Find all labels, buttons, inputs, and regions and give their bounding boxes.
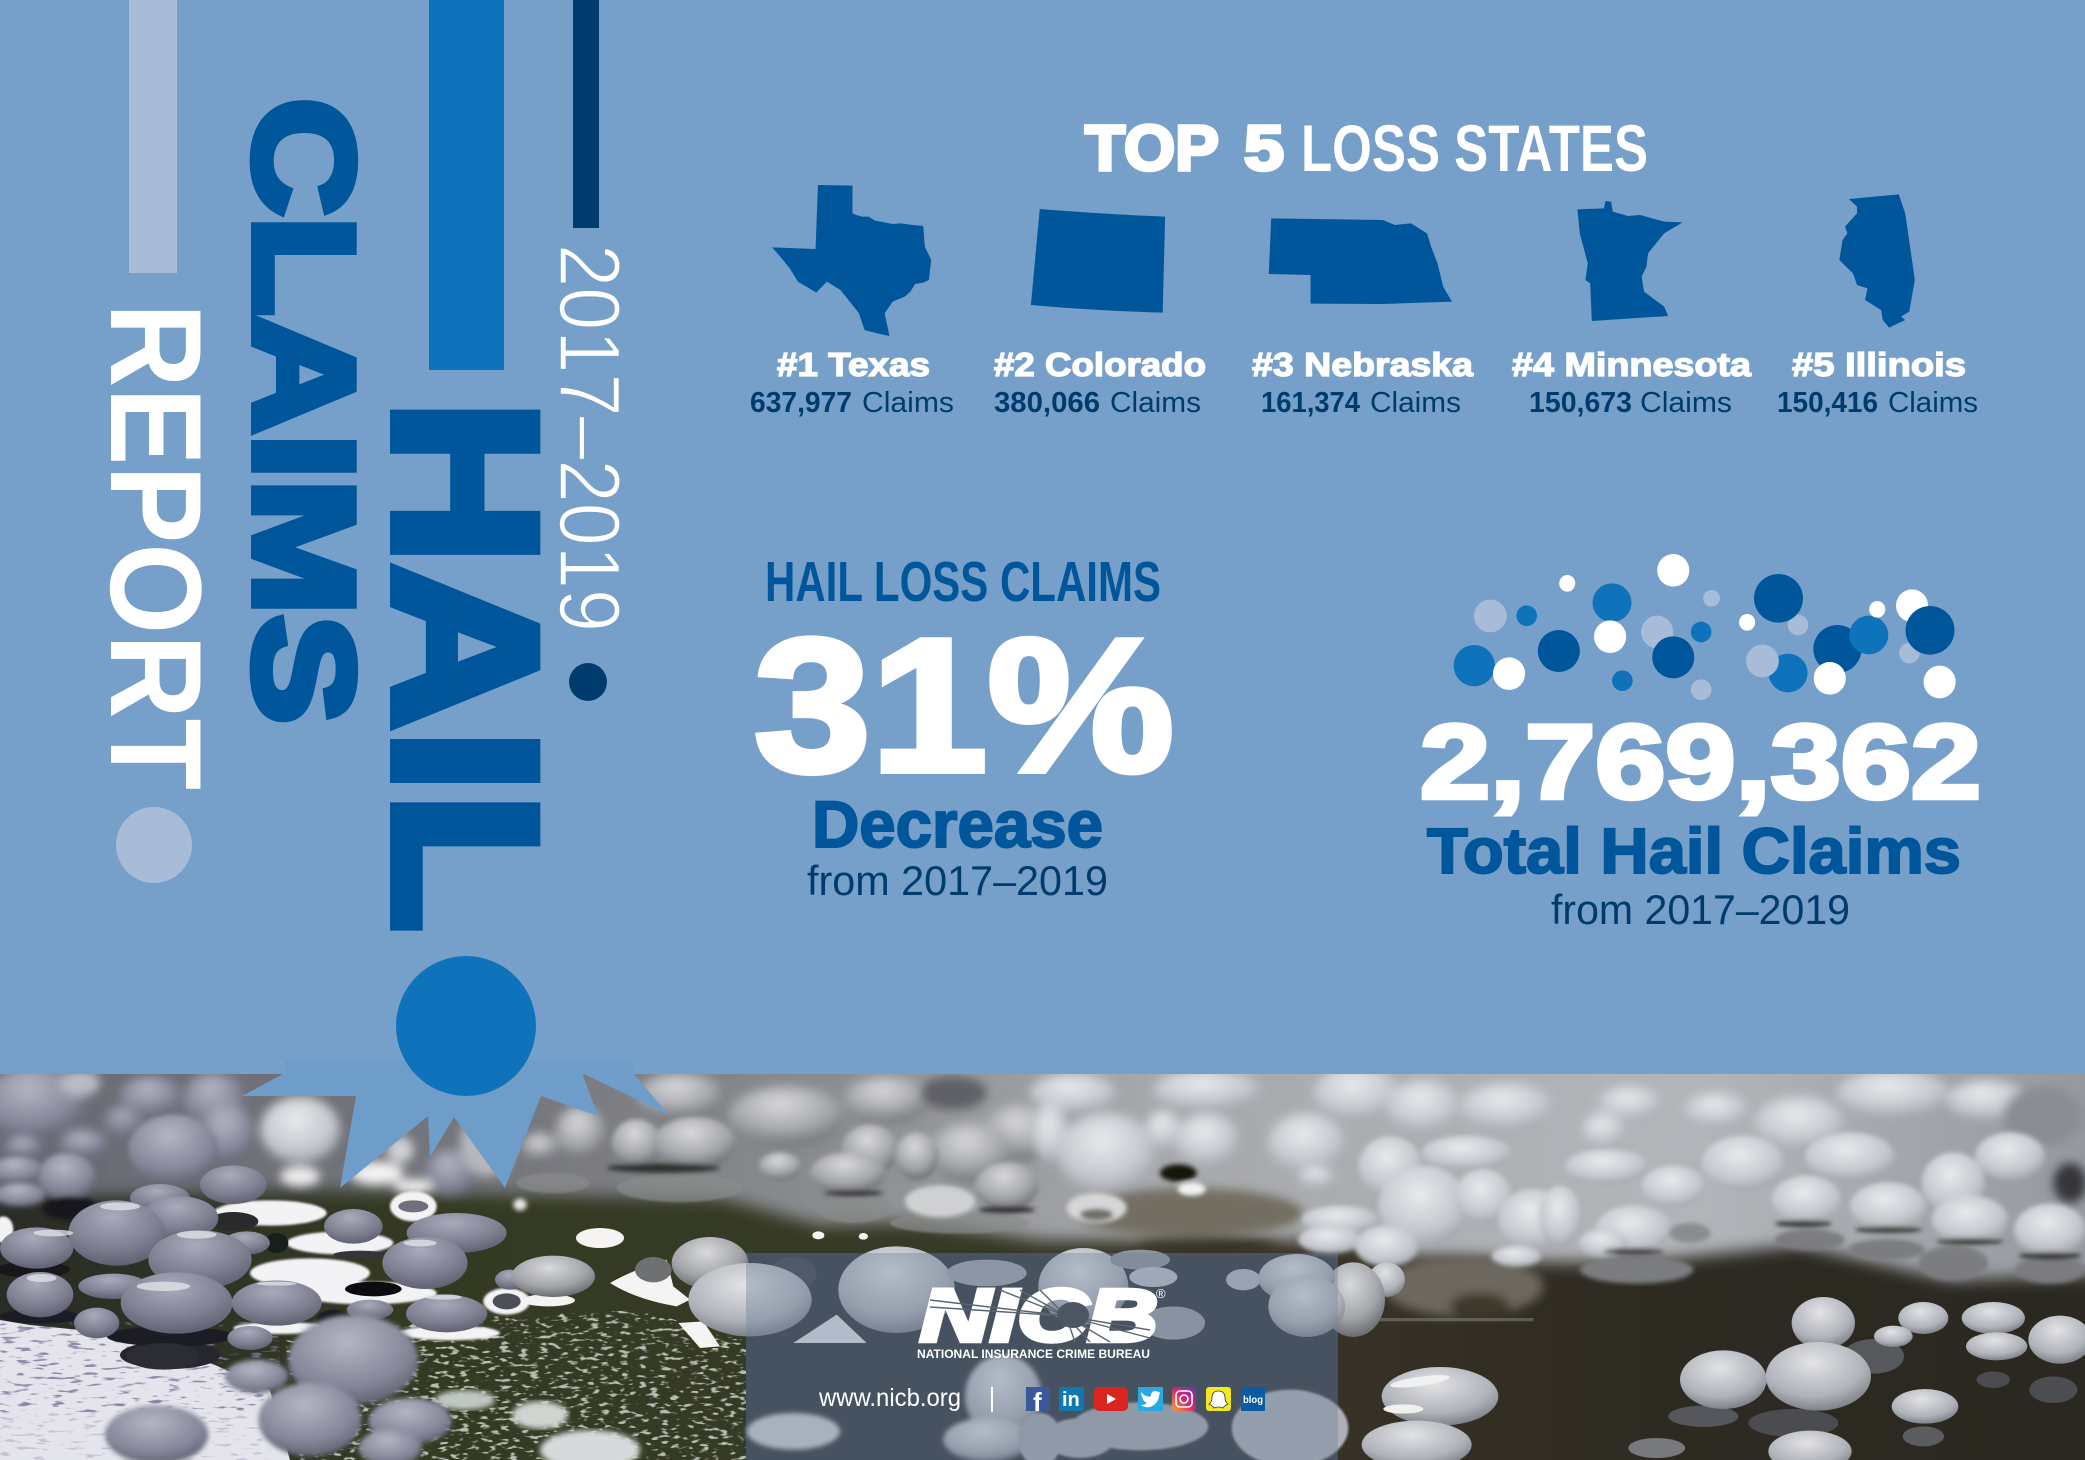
label: Texas <box>750 346 954 419</box>
label: Minnesota <box>1512 346 1752 419</box>
stat: total hail claims: 2,769,362 <box>1420 704 1981 821</box>
label: Colorado <box>994 346 1206 419</box>
icon: blog: blog <box>1243 1395 1263 1406</box>
stat: total hail claims: Total Hail Claims <box>1427 815 1961 887</box>
vertical date range: 2017–2019 <box>541 244 637 632</box>
icon: blog <box>1241 1387 1265 1411</box>
heading: top 5 loss states: LOSS STATES <box>1301 111 1648 185</box>
logo tagline: NATIONAL INSURANCE CRIME BUREAU <box>917 1347 1150 1361</box>
vertical title: HAIL: HAIL <box>351 400 579 932</box>
heading: top 5 loss states <box>1085 111 1648 185</box>
stat: total hail claims: from 2017–2019 <box>1551 886 1850 933</box>
puddles <box>522 1228 868 1348</box>
label: Colorado: Claims <box>1110 387 1201 419</box>
label: Texas: #1 Texas <box>777 346 930 383</box>
icon: facebook: f <box>1033 1387 1042 1417</box>
hailstones: centre-right section <box>1018 1066 1568 1460</box>
icon: Colorado <box>1031 209 1165 313</box>
label: Nebraska: #3 Nebraska <box>1252 346 1474 383</box>
icon: linkedin: in <box>1062 1389 1080 1411</box>
state maps <box>772 185 1915 336</box>
starburst ribbon <box>242 1060 669 1188</box>
label: Illinois <box>1777 346 1978 419</box>
sparkling wet ground <box>285 1310 746 1460</box>
social icons <box>1026 1387 1265 1417</box>
icon: twitter <box>1138 1387 1163 1411</box>
vertical title: REPORT: REPORT <box>83 303 229 790</box>
label: Illinois: 150,416 <box>1777 387 1878 419</box>
icon: youtube <box>1094 1387 1128 1411</box>
heading: top 5 loss states: 5 <box>1244 112 1284 184</box>
bar: dark navy <box>573 0 599 228</box>
label: Colorado: 380,066 <box>994 387 1100 419</box>
bar: medium blue <box>429 0 504 370</box>
icon: Nebraska <box>1269 218 1452 304</box>
label: Nebraska: Claims <box>1370 387 1461 419</box>
icon: snapchat <box>1206 1387 1231 1411</box>
white puddles <box>0 1191 530 1340</box>
label: Illinois: #5 Illinois <box>1792 346 1966 383</box>
stat: total hail claims <box>1420 704 1981 933</box>
reflective white ground at lower left <box>0 1320 290 1460</box>
icon: Texas <box>772 185 931 336</box>
stat: 31 percent decrease: from 2017–2019 <box>807 857 1108 904</box>
label: Nebraska: 161,374 <box>1261 387 1360 419</box>
label: Colorado: #2 Colorado <box>994 346 1206 383</box>
circle medallion <box>396 956 536 1096</box>
icon: hailstone bubbles <box>1454 554 1956 700</box>
label: Texas: Claims <box>862 387 954 419</box>
hailstones: centre-left section <box>512 1073 1057 1460</box>
heading: top 5 loss states: TOP <box>1085 112 1219 184</box>
hailstones: left section <box>0 1066 530 1460</box>
photo: hailstones on wet ground <box>0 1040 2085 1460</box>
stat: 31 percent decrease: 31% <box>754 600 1174 812</box>
label: Minnesota: Claims <box>1640 387 1732 419</box>
hailstones: right section <box>1539 1070 2085 1460</box>
dot: dark navy <box>569 663 607 701</box>
label: Texas: 637,977 <box>750 387 852 419</box>
vertical title: CLAIMS: CLAIMS <box>224 98 383 724</box>
label: Minnesota: #4 Minnesota <box>1512 346 1752 383</box>
registered mark: ® <box>1156 1286 1166 1301</box>
stat: 31 percent decrease: Decrease <box>812 787 1103 861</box>
dot: lavender <box>116 807 192 883</box>
highlights on foreground stones <box>27 1202 462 1300</box>
stat: 31 percent decrease: HAIL LOSS CLAIMS <box>765 550 1161 614</box>
icon: Illinois <box>1839 194 1915 328</box>
label: Minnesota: 150,673 <box>1529 387 1632 419</box>
icon: Minnesota <box>1577 201 1683 321</box>
icon: instagram <box>1172 1387 1196 1411</box>
icon: facebook <box>1026 1387 1050 1417</box>
icon: linkedin <box>1059 1387 1084 1411</box>
stat: 31 percent decrease <box>754 550 1174 904</box>
website address: www.nicb.org <box>818 1384 961 1412</box>
label: Illinois: Claims <box>1888 387 1978 419</box>
separator <box>991 1387 993 1412</box>
logo: NICB: NICB <box>920 1274 1158 1357</box>
footer: logo and social panel <box>746 1253 1338 1460</box>
bar: lavender <box>129 0 177 273</box>
label: Nebraska <box>1252 346 1474 419</box>
